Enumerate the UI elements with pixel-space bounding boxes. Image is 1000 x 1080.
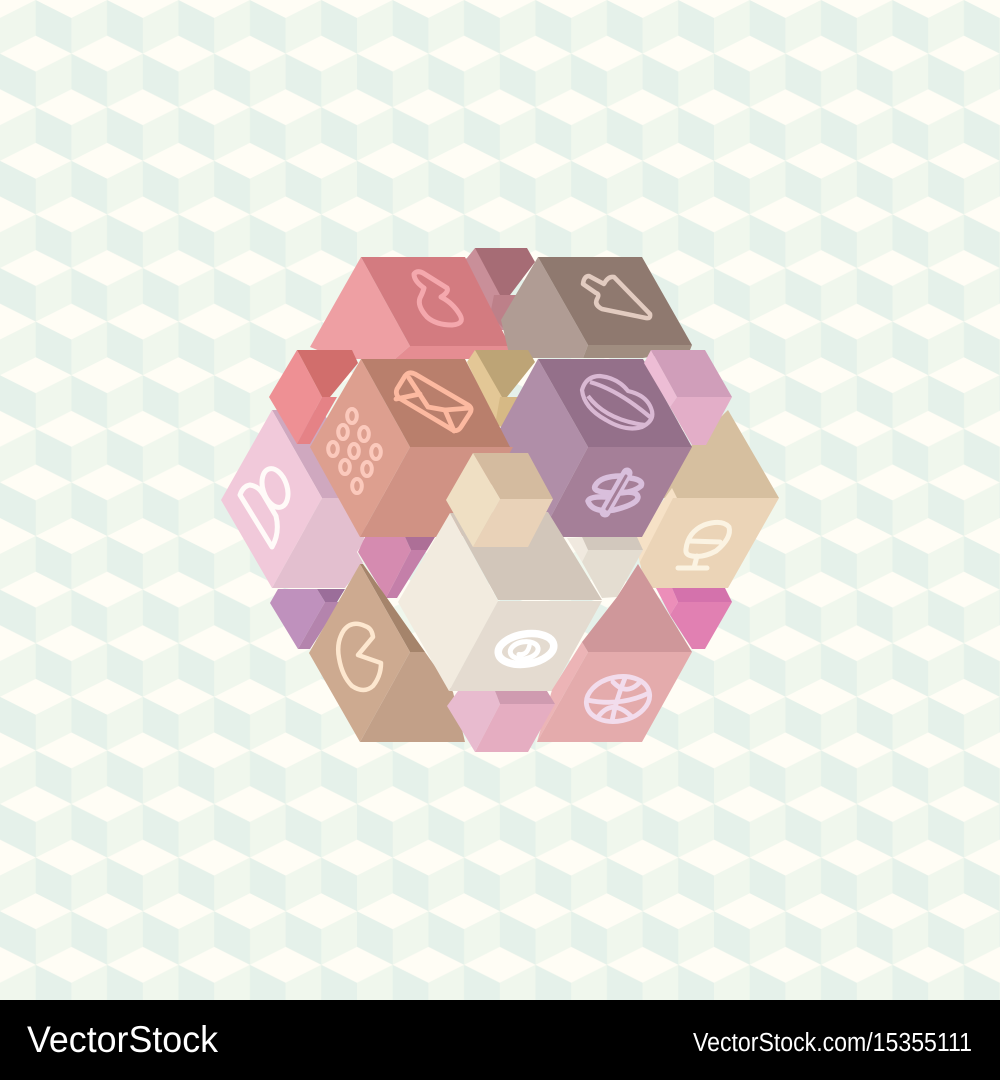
footer url text: VectorStock.com/15355111 — [693, 1029, 972, 1057]
cube: small cream center — [446, 453, 553, 547]
cube: small dark rose — [460, 248, 535, 330]
icon: wine glass — [678, 522, 729, 568]
cube: taupe with arrow cursor — [501, 257, 692, 358]
icon: swirl — [496, 630, 556, 668]
icon: envelope — [396, 373, 471, 431]
icon: letter B — [240, 465, 293, 547]
icon: coffee bean — [582, 376, 652, 428]
cube: pale pink with letter B — [221, 410, 372, 588]
cube: salmon with mail and dots — [310, 359, 513, 537]
icon: basketball — [582, 671, 654, 727]
icon: dot grid — [328, 409, 381, 493]
cube: tan with wine glass — [636, 410, 779, 588]
cube: small pink bottom — [447, 691, 555, 752]
cube: rose with basketball — [537, 564, 692, 742]
footer logo text: VectorStock — [27, 1019, 218, 1060]
footer: black band — [0, 1000, 1000, 1080]
cube: small light pink — [644, 350, 732, 445]
cube: purple with coffee bean and dollar — [490, 359, 692, 537]
cube: pink with music note — [310, 257, 513, 359]
icon: music note — [414, 272, 461, 325]
cube: small hot pink — [656, 588, 732, 649]
icon: arrow cursor — [583, 276, 650, 318]
cube: small purple — [270, 589, 345, 649]
cube: tan with pacman chart — [309, 564, 465, 742]
cluster: isometric icon cubes — [221, 248, 779, 752]
cube: small magenta pink — [358, 537, 435, 598]
cube: small gold — [467, 350, 535, 428]
cube: small off-white — [567, 537, 643, 598]
cube: small red — [269, 350, 358, 444]
cube: big cream with swirl — [398, 512, 602, 691]
icon: dollar sign — [588, 473, 642, 512]
icon: pie chart — [338, 624, 381, 690]
